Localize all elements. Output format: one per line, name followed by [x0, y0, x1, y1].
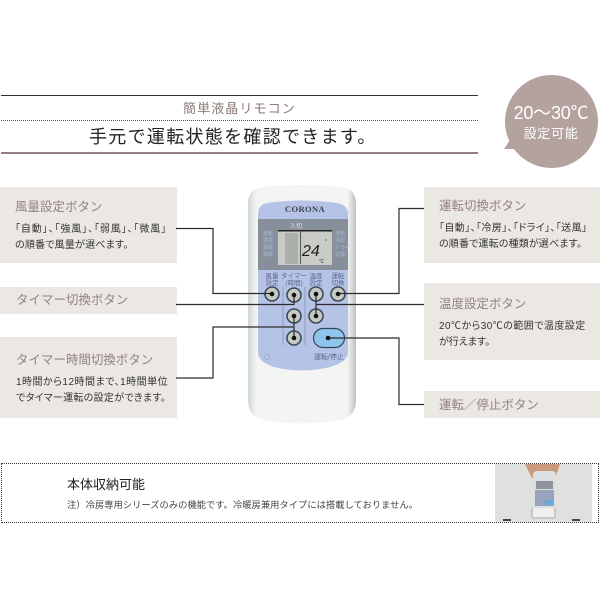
- text: fan speed: の順番で風量が選べます。: [15, 240, 129, 251]
- remote control: 入切: [290, 223, 302, 230]
- remote control: タイマー: [281, 271, 307, 280]
- remote control: 微風: [263, 251, 273, 258]
- heading: mode: 運転切換ボタン: [439, 199, 526, 213]
- text: fan speed: [15, 223, 167, 251]
- text: timer hours: 1時間から12時間まで、1時間単位: [16, 377, 168, 388]
- text: fan speed: 「自動」、「強風」、「弱風」、「微風」: [15, 224, 167, 235]
- remote control: 弱風: [263, 245, 273, 251]
- heading: storage: 本体収納可能: [67, 477, 145, 492]
- remote control: 冷房: [335, 237, 345, 244]
- remote control: 24: [301, 243, 320, 260]
- panel: temperature button: [424, 283, 600, 360]
- text: mode: [439, 222, 587, 250]
- remote control: 送風: [335, 251, 345, 258]
- panel: run stop button: 運転／停止ボタン: [439, 398, 539, 412]
- title block: [1, 95, 478, 154]
- panel: storage note: [1, 463, 599, 523]
- remote control: °: [325, 239, 327, 245]
- remote control: ドライ: [335, 245, 350, 251]
- text: timer hours: でタイマー運転の設定ができます。: [16, 393, 166, 404]
- panel: run stop button: [424, 391, 600, 418]
- badge: temperature range: 20～30℃: [514, 103, 588, 123]
- remote control: 設定: [266, 279, 279, 287]
- remote control: 運転: [332, 271, 345, 280]
- remote control: 設定: [310, 279, 323, 287]
- remote control: (時間): [285, 279, 303, 287]
- text: temperature: が行えます。: [439, 337, 490, 348]
- heading: fan speed: 風量設定ボタン: [15, 200, 102, 214]
- headline: 手元で運転状態を確認できます。: [89, 127, 377, 147]
- heading: timer hours: タイマー時間切換ボタン: [16, 353, 153, 367]
- text: mode: 「自動」、「冷房」、「ドライ」、「送風」: [439, 223, 587, 234]
- badge: temperature range: [504, 75, 598, 168]
- remote control: 切換: [332, 278, 345, 287]
- subtitle: 簡単液晶リモコン: [183, 101, 296, 116]
- panel: fan speed button: [0, 187, 177, 263]
- note text: 注）冷房専用シリーズのみの機能です。冷暖房兼用タイプには搭載しておりません。: [67, 500, 418, 510]
- remote control: 自動: [335, 230, 345, 237]
- remote control: CORONA: [285, 204, 326, 214]
- panel: timer toggle button: タイマー切換ボタン: [16, 293, 128, 307]
- remote control: ℃: [319, 259, 324, 265]
- remote control: 風量: [266, 272, 279, 280]
- text: temperature: [439, 320, 586, 348]
- remote control: 温度: [310, 271, 323, 280]
- panel: mode button: [424, 187, 600, 263]
- badge: temperature range: 設定可能: [524, 126, 578, 141]
- remote control: [248, 185, 356, 424]
- remote control: 自動: [263, 230, 273, 237]
- remote control: 運転/停止: [314, 352, 344, 361]
- text: timer hours: [16, 376, 168, 404]
- text: temperature: 20℃から30℃の範囲で温度設定: [439, 321, 586, 332]
- text: mode: の順番で運転の種類が選べます。: [439, 239, 582, 250]
- remote control: 強風: [263, 237, 273, 244]
- panel: timer toggle button: [0, 287, 177, 314]
- panel: timer hours button: [0, 337, 177, 418]
- photo: remote in holder: [495, 464, 592, 522]
- heading: temperature: 温度設定ボタン: [439, 297, 526, 311]
